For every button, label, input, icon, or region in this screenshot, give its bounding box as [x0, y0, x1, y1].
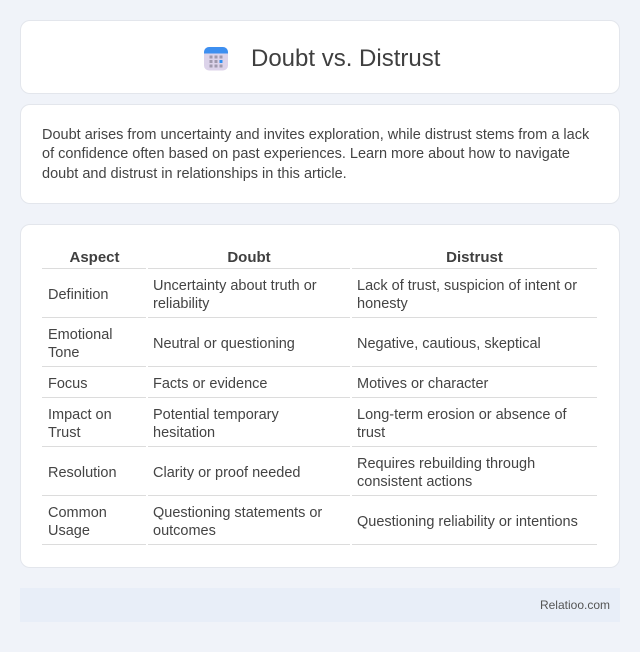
table header: Distrust: [446, 249, 503, 266]
row: emotional tone: Tone: [48, 345, 79, 361]
text block: introduction: Doubt arises from uncertainty and invites exploration, while distrust stems from a lack: [42, 126, 589, 142]
row: impact on trust: Long-term erosion or absence of: [357, 407, 567, 423]
text block: introduction: doubt and distrust in relationships in this article.: [42, 166, 347, 182]
footer credit: Relatioo.com: [540, 598, 610, 612]
text block: introduction: of confidence often based on past experiences. Learn more about how to navigate: [42, 146, 570, 162]
panel: introduction: [20, 104, 620, 204]
row: resolution: Requires rebuilding through: [357, 456, 535, 472]
icon: calendar: [204, 47, 228, 70]
row: definition: [48, 278, 577, 312]
row: common usage: Questioning statements or: [153, 505, 322, 521]
row: impact on trust: Trust: [48, 425, 80, 441]
row: resolution: [48, 456, 535, 490]
row: emotional tone: [48, 327, 541, 361]
row: common usage: outcomes: [153, 523, 216, 539]
row: definition: Uncertainty about truth or: [153, 278, 317, 294]
table header: Aspect: [69, 249, 120, 266]
row: definition: Lack of trust, suspicion of intent or: [357, 278, 577, 294]
row: focus: Focus: [48, 376, 88, 392]
row: impact on trust: [48, 407, 567, 441]
row: impact on trust: trust: [357, 425, 385, 441]
text block: introduction: [42, 126, 590, 182]
row: emotional tone: Negative, cautious, skeptical: [357, 336, 541, 352]
row: common usage: Usage: [48, 523, 90, 539]
table header: [69, 249, 503, 266]
row: impact on trust: Impact on: [48, 407, 112, 423]
row: resolution: Resolution: [48, 465, 117, 481]
row: definition: reliability: [153, 296, 209, 312]
table header: Doubt: [227, 249, 271, 266]
row: emotional tone: Emotional: [48, 327, 112, 343]
footer bar: [20, 588, 620, 622]
row: focus: Motives or character: [357, 376, 488, 392]
row: definition: honesty: [357, 296, 408, 312]
row: definition: Definition: [48, 287, 108, 303]
row: common usage: Common: [48, 505, 107, 521]
row: resolution: consistent actions: [357, 474, 472, 490]
row: emotional tone: Neutral or questioning: [153, 336, 295, 352]
title: Doubt vs. Distrust: [251, 45, 440, 72]
panel: comparison table: [20, 224, 620, 568]
row: common usage: [48, 505, 578, 539]
row: impact on trust: Potential temporary: [153, 407, 279, 423]
row: resolution: Clarity or proof needed: [153, 465, 300, 481]
row: focus: Facts or evidence: [153, 376, 267, 392]
row: common usage: Questioning reliability or intentions: [357, 514, 578, 530]
row: focus: [48, 376, 488, 392]
row: impact on trust: hesitation: [153, 425, 215, 441]
panel: title card: [20, 20, 620, 94]
